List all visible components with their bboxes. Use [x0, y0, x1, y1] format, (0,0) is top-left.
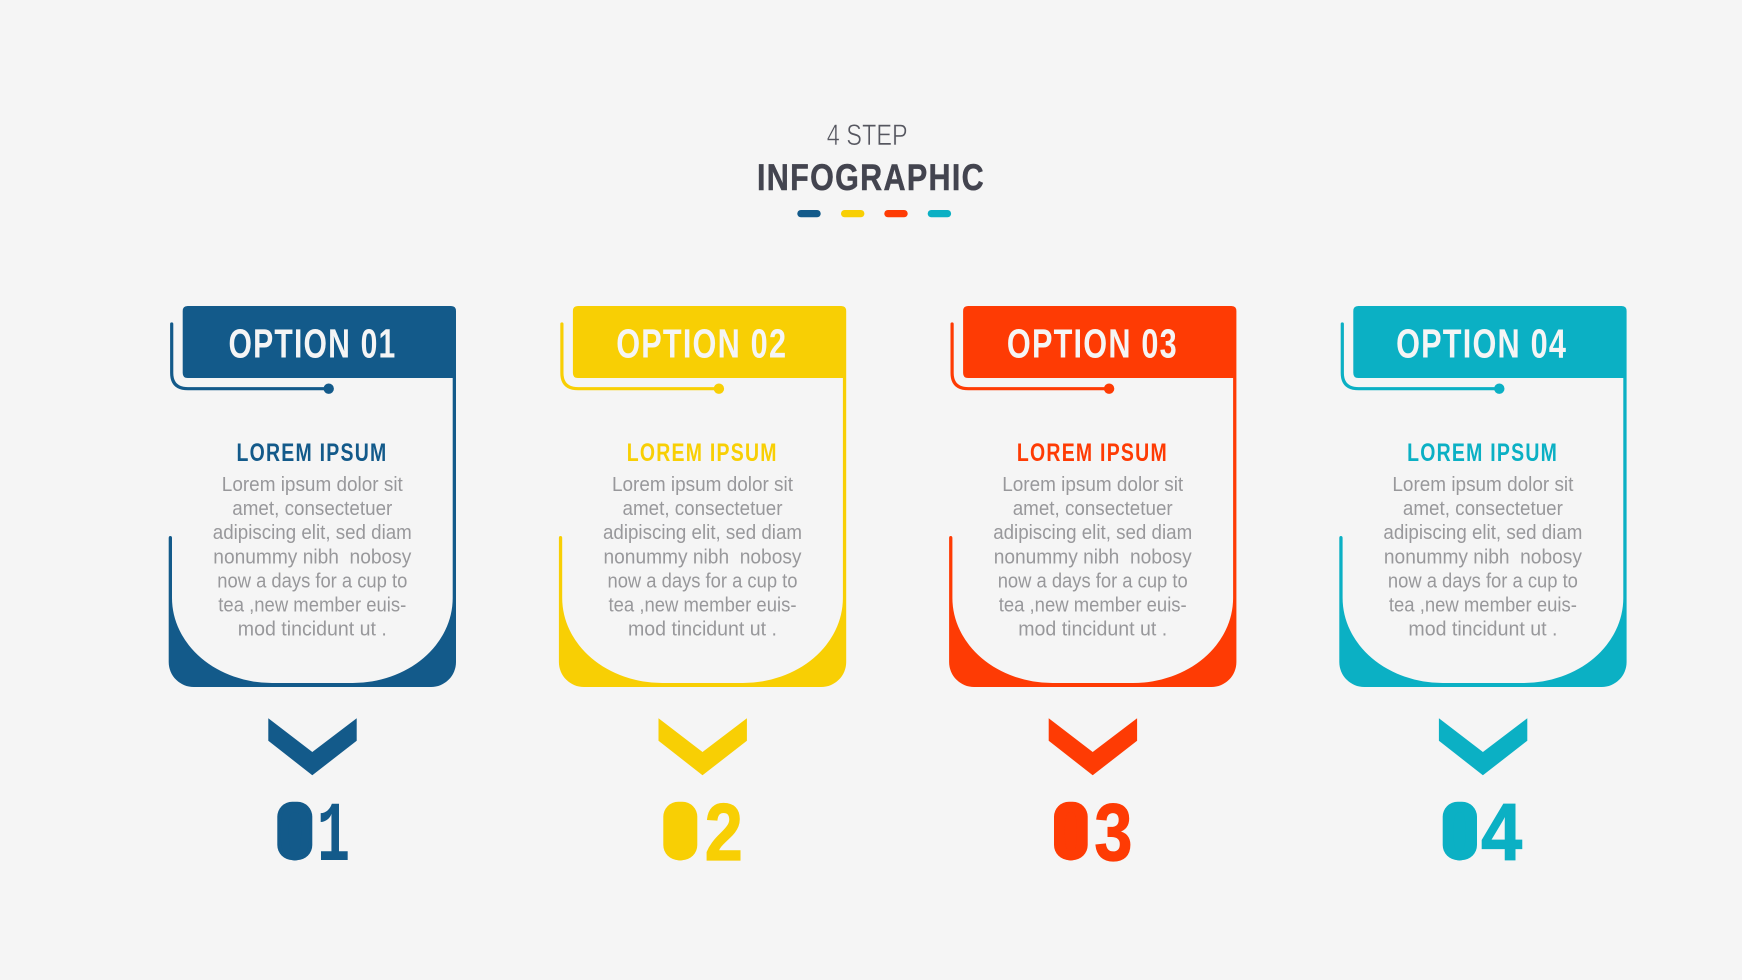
arrow: chevron down	[1049, 718, 1137, 775]
body text: mod tincidunt ut .	[628, 618, 777, 640]
panel: option 01	[169, 306, 456, 886]
arrow: chevron down	[658, 718, 747, 775]
body text: tea ,new member euis-	[1389, 594, 1577, 616]
body text	[993, 474, 1192, 640]
step number 03: 3	[1094, 788, 1132, 878]
body text: adipiscing elit, sed diam	[1383, 522, 1582, 544]
step number 04: 0	[1443, 788, 1476, 878]
body text: mod tincidunt ut .	[238, 618, 387, 640]
title block	[757, 119, 985, 217]
body text: tea ,new member euis-	[608, 594, 796, 616]
step number 02: 0	[664, 788, 697, 878]
body text	[213, 474, 412, 640]
panel: option 03	[949, 306, 1236, 878]
body text: adipiscing elit, sed diam	[603, 522, 802, 544]
connector line with dot	[952, 324, 1114, 394]
body text: amet, consectetuer	[232, 498, 393, 520]
header label: OPTION 04	[1396, 320, 1567, 366]
header tab	[573, 306, 846, 378]
header label: OPTION 01	[228, 320, 396, 366]
body text: Lorem ipsum dolor sit	[222, 474, 403, 496]
body text: Lorem ipsum dolor sit	[1392, 474, 1574, 496]
colour key dashes	[797, 210, 951, 217]
header label: OPTION 02	[616, 320, 787, 366]
header tab	[1353, 306, 1627, 378]
body text: adipiscing elit, sed diam	[993, 522, 1192, 544]
card outline	[1339, 378, 1627, 687]
body text: mod tincidunt ut .	[1018, 618, 1167, 640]
subheading: LOREM IPSUM	[236, 439, 388, 467]
card outline	[559, 378, 846, 687]
body text: now a days for a cup to	[608, 570, 798, 592]
body text: now a days for a cup to	[998, 570, 1188, 592]
card outline	[169, 378, 456, 687]
panel: option 02	[559, 306, 846, 878]
body text: nonummy nibh nobosy	[1384, 546, 1582, 568]
step number 04	[1443, 788, 1522, 878]
header tab	[963, 306, 1236, 378]
step number 03: 0	[1054, 788, 1087, 878]
card outline	[949, 378, 1236, 687]
step number 03	[1054, 788, 1132, 878]
step number 01: 0	[278, 788, 312, 878]
body text: amet, consectetuer	[622, 498, 783, 520]
body text: tea ,new member euis-	[999, 594, 1187, 616]
step number 02	[663, 788, 743, 878]
body text: nonummy nibh nobosy	[213, 546, 411, 568]
connector line with dot	[1342, 324, 1504, 394]
title: INFOGRAPHIC: INFOGRAPHIC	[757, 157, 985, 198]
step number 02: 2	[705, 788, 743, 878]
subheading: LOREM IPSUM	[1407, 439, 1558, 467]
body text: now a days for a cup to	[1388, 570, 1578, 592]
header label: OPTION 03	[1007, 320, 1178, 366]
body text	[603, 474, 802, 640]
body text: nonummy nibh nobosy	[604, 546, 802, 568]
connector line with dot	[172, 324, 334, 394]
body text: amet, consectetuer	[1013, 498, 1173, 520]
body text	[1383, 474, 1582, 640]
panel: option 04	[1339, 306, 1627, 878]
arrow: chevron down	[1439, 718, 1527, 775]
body text: amet, consectetuer	[1403, 498, 1563, 520]
step number 01: 1	[317, 789, 350, 886]
step number 04: 4	[1481, 788, 1522, 878]
connector line with dot	[562, 324, 724, 394]
title: 4 STEP: 4 STEP	[827, 119, 908, 152]
body text: adipiscing elit, sed diam	[213, 522, 412, 544]
body text: now a days for a cup to	[217, 570, 407, 592]
body text: mod tincidunt ut .	[1408, 618, 1557, 640]
body text: Lorem ipsum dolor sit	[612, 474, 793, 496]
body text: nonummy nibh nobosy	[994, 546, 1192, 568]
arrow: chevron down	[268, 718, 357, 775]
subheading: LOREM IPSUM	[1017, 439, 1168, 467]
subheading: LOREM IPSUM	[627, 439, 778, 467]
step number 01	[277, 788, 350, 886]
body text: Lorem ipsum dolor sit	[1002, 474, 1184, 496]
body text: tea ,new member euis-	[218, 594, 406, 616]
header tab	[183, 306, 456, 378]
